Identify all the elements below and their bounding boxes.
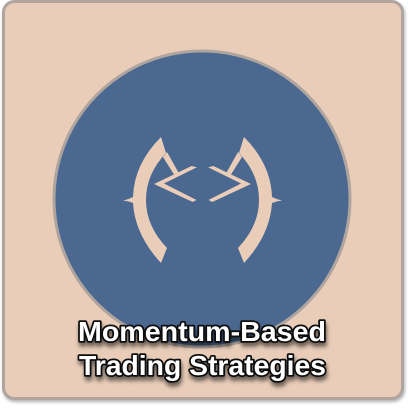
title line 2: Trading Strategies [79,350,326,381]
left thin line [163,152,178,174]
blue circle [54,51,350,347]
title [78,316,326,381]
title line 1: Momentum-Based [78,316,326,347]
left chevron [154,166,197,202]
left bracket arc [123,137,167,263]
icon: momentum brackets [123,137,282,263]
right bracket arc [238,137,282,263]
right chevron [208,166,251,202]
right thin line [226,152,242,174]
